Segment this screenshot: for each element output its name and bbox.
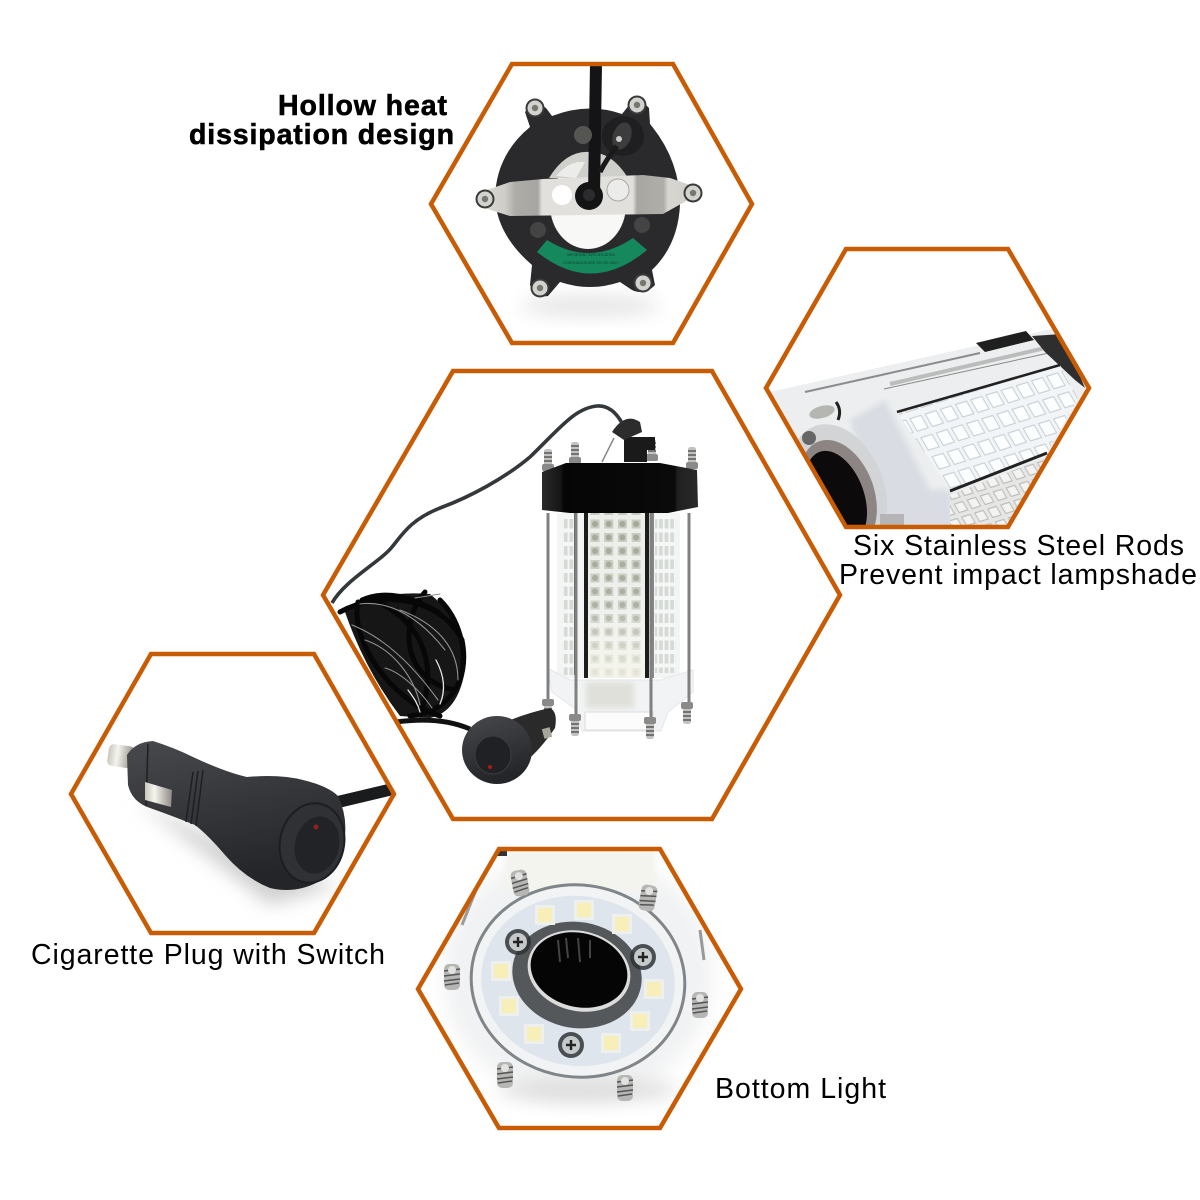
steel bracket [478, 175, 699, 216]
body grooves [146, 744, 203, 826]
lower LED panel [950, 458, 1045, 530]
heading: hollow heat dissipation design: dissipation design [189, 119, 454, 151]
caption: six stainless steel rods: Prevent impact lampshade [839, 559, 1197, 591]
panel: hollow heat dissipation top view [431, 64, 752, 343]
side connector [600, 116, 644, 172]
power cable [332, 406, 622, 603]
clear end cap [850, 400, 955, 530]
panel: six stainless steel rods close-up [764, 246, 1092, 530]
ring LEDs [491, 900, 664, 1053]
panel: cigarette plug close-up [71, 654, 394, 933]
rod bolts [542, 439, 698, 739]
heading: hollow heat dissipation design [189, 90, 454, 151]
steel rods [548, 513, 689, 725]
LED side panels [563, 515, 575, 675]
steel rods [805, 331, 1085, 392]
clear bottom cap [547, 668, 693, 731]
LED panel [897, 365, 1078, 491]
heading: hollow heat dissipation design: Hollow heat [278, 90, 448, 122]
cable connector [602, 419, 655, 462]
lamp body [557, 513, 680, 678]
lamp body [771, 329, 1086, 494]
metal clip [145, 782, 172, 807]
LED ring [470, 883, 686, 1079]
clear housing [443, 850, 713, 1102]
soft shadow [149, 808, 334, 910]
cable to plug [396, 720, 470, 729]
lamp top plate [495, 102, 680, 316]
lens ring [798, 424, 887, 525]
inline switch plug [462, 708, 556, 784]
plug body [127, 741, 345, 890]
plug cable [338, 789, 393, 802]
coiled cable [340, 592, 465, 718]
green label: IMPORTANT SPECIFICATION [567, 253, 615, 257]
black top cap [542, 463, 698, 513]
ring screws [505, 929, 656, 1058]
caption: cigarette plug with switch: Cigarette Plug with Switch [31, 939, 385, 971]
green label [537, 238, 647, 274]
panel: complete fishing light product [323, 371, 840, 819]
rocker switch [278, 802, 346, 884]
bolts [802, 402, 904, 528]
LED front panel [588, 513, 645, 677]
caption: six stainless steel rods: Six Stainless Steel Rods [853, 530, 1184, 562]
lamp hollow centre [551, 178, 626, 249]
cable and grommet [575, 64, 603, 210]
central tube [512, 922, 642, 1028]
caption: bottom light: Bottom Light [715, 1073, 886, 1105]
metal tip [107, 744, 134, 768]
panel: bottom light close-up [418, 849, 741, 1128]
mounting screws [476, 96, 702, 298]
green label: CONTINUOUS USE 12V DC ONLY [563, 261, 619, 265]
caption: six stainless steel rods [839, 530, 1197, 591]
outer bolts [444, 869, 708, 1101]
